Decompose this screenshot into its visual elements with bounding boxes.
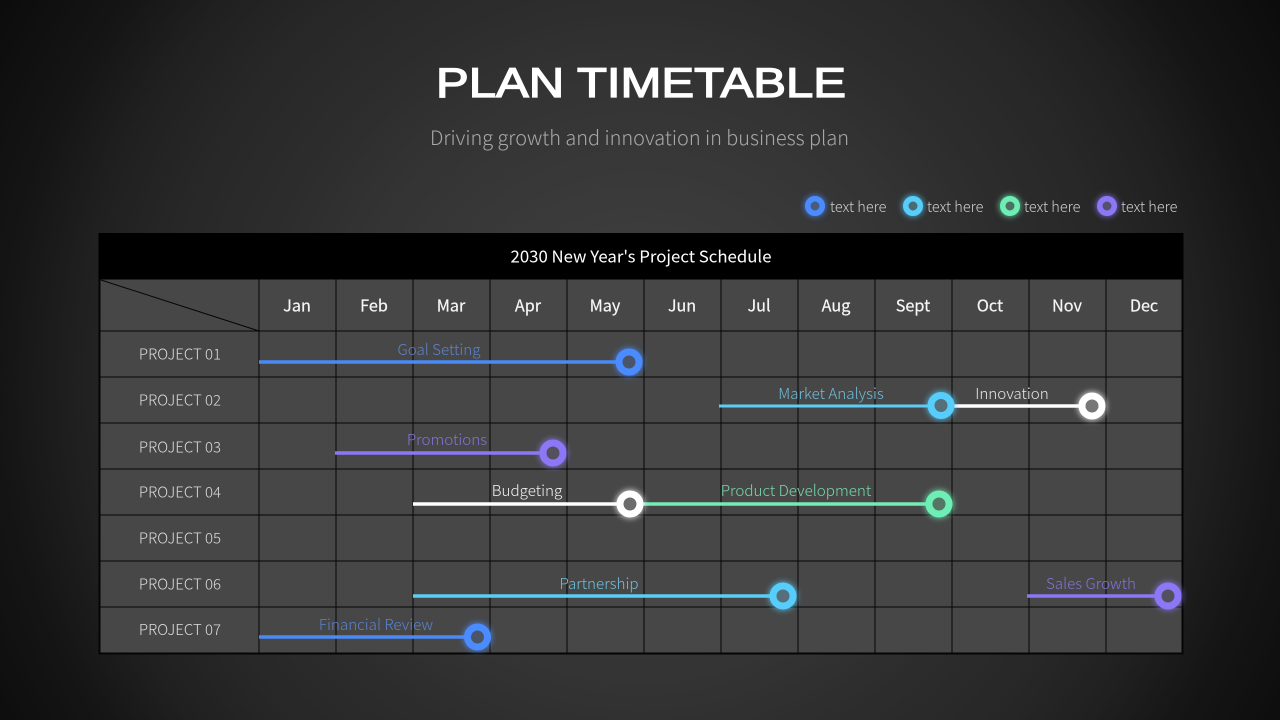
month labels: Nov: [1052, 292, 1083, 316]
project labels: PROJECT 04: [139, 482, 221, 502]
task: Innovation: [930, 382, 1103, 417]
table header band: [98, 233, 1184, 280]
month labels: Aug: [822, 292, 850, 316]
month labels: Mar: [437, 292, 466, 316]
legend: [807, 196, 1178, 217]
task: Budgeting: [413, 479, 641, 515]
month labels: Jan: [283, 292, 311, 316]
task: Sales Growth: [1027, 572, 1179, 607]
schedule table: [98, 233, 1184, 654]
task: Budgeting: Budgeting: [492, 479, 563, 501]
legend item: purple: text here: [1121, 196, 1178, 217]
project labels: PROJECT 03: [139, 436, 221, 458]
legend item: green: text here: [1024, 196, 1081, 217]
task: Partnership: Partnership: [559, 572, 639, 594]
month labels: Jun: [668, 292, 696, 316]
subtitle: Driving growth and innovation in business plan: [430, 122, 849, 151]
project labels: PROJECT 01: [139, 344, 221, 364]
task: Promotions: [335, 428, 564, 464]
month labels: Apr: [515, 292, 542, 316]
task: Product Development: [630, 479, 950, 515]
project labels: PROJECT 06: [139, 574, 221, 594]
table body: [98, 233, 1184, 654]
project labels: PROJECT 07: [139, 619, 221, 640]
table header band: 2030 New Year's Project Schedule: [510, 244, 772, 268]
month labels: Dec: [1130, 292, 1158, 316]
project labels: [139, 344, 221, 640]
project labels: PROJECT 02: [139, 390, 221, 410]
title: PLAN TIMETABLE: [436, 59, 846, 106]
legend item: blue: text here: [830, 196, 887, 217]
task: Promotions: Promotions: [407, 428, 487, 450]
task: Sales Growth: Sales Growth: [1046, 572, 1136, 594]
task: Innovation: Innovation: [975, 382, 1049, 404]
month labels: May: [590, 292, 621, 316]
task: Product Development: Product Development: [721, 479, 872, 501]
month labels: Oct: [977, 292, 1003, 316]
month labels: Sept: [896, 292, 930, 316]
legend item: cyan: text here: [927, 196, 984, 217]
task: Financial Review: [259, 613, 488, 648]
month labels: Jul: [747, 292, 771, 316]
task: Market Analysis: Market Analysis: [778, 382, 884, 404]
month labels: Feb: [360, 292, 388, 316]
project labels: PROJECT 05: [139, 528, 221, 548]
month labels: [283, 292, 1158, 316]
task: Goal Setting: Goal Setting: [397, 338, 481, 360]
task: Goal Setting: [259, 338, 640, 373]
task: Financial Review: Financial Review: [319, 613, 433, 635]
task: Partnership: [413, 572, 794, 607]
